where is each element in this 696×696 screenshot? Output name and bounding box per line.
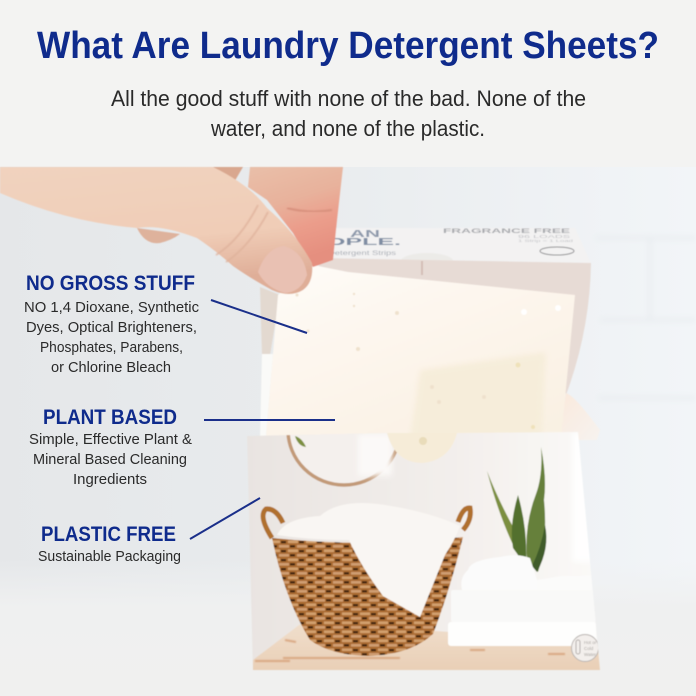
callout: plant based	[29, 406, 192, 488]
box lid, printed outer side	[320, 228, 591, 269]
printed: wooden table	[253, 622, 600, 670]
printed: hot or cold water badge: Water	[584, 652, 596, 657]
pointer line: plant based	[204, 419, 335, 421]
callout: no gross stuff: Dyes, Optical Brighteners,	[26, 319, 197, 336]
soft second sheet showing through	[410, 352, 546, 440]
right side flap	[558, 393, 600, 440]
printed: window light	[578, 440, 579, 441]
printed: folded towel stack	[448, 554, 572, 646]
subtitle	[111, 86, 586, 141]
subtitle: All the good stuff with none of the bad. None of the	[111, 86, 586, 111]
hand: thumb	[0, 167, 312, 294]
printed: basket handles	[263, 508, 470, 538]
hand: thumb curl shadow	[137, 228, 180, 243]
printed: hot or cold water badge: Cold	[584, 646, 594, 651]
subtitle: water, and none of the plastic.	[210, 116, 485, 141]
printed: snake plant	[487, 447, 546, 572]
printed: hot or cold water badge	[572, 634, 598, 662]
pointer line: plastic free	[190, 498, 260, 539]
lid fold crease	[421, 261, 423, 275]
callout: no gross stuff: NO GROSS STUFF	[26, 272, 195, 295]
box lid, inner side	[318, 258, 591, 395]
callout: plant based: Mineral Based Cleaning	[33, 451, 187, 468]
index knuckle crease	[287, 208, 332, 212]
printed: round mirror	[286, 434, 398, 488]
box front face with printed photo	[248, 432, 600, 670]
printed: wicker basket	[271, 536, 464, 656]
box lid, printed outer side: Detergent Strips	[328, 251, 396, 257]
back finger	[213, 167, 243, 184]
box lid, printed outer side: AN	[350, 229, 380, 240]
printed: towel in basket	[277, 503, 460, 617]
thumbnail	[258, 246, 307, 293]
callout: no gross stuff: NO 1,4 Dioxane, Synthetic	[24, 299, 199, 316]
callout: plant based: Ingredients	[73, 471, 147, 488]
box lid, printed outer side: OPLE.	[326, 237, 402, 248]
box lid, printed outer side: FRAGRANCE FREE	[443, 229, 570, 235]
photo: detergent sheet box and hand	[0, 167, 602, 670]
title: What Are Laundry Detergent Sheets?	[37, 25, 659, 67]
printed: hot or cold water badge: Hot or	[584, 640, 597, 645]
pointer line: no gross stuff	[211, 300, 307, 333]
sheet notch tint	[385, 433, 460, 464]
hand: index finger	[248, 167, 343, 267]
header band	[0, 0, 696, 167]
box lid, printed outer side: 1 Strip = 1 Load	[518, 238, 573, 243]
callout: plastic free: Sustainable Packaging	[38, 548, 181, 565]
callout: plastic free	[38, 523, 181, 565]
left inner flap	[260, 287, 280, 355]
callout: plant based: Simple, Effective Plant &	[29, 431, 192, 448]
photo background	[0, 167, 402, 586]
white inner box wall	[260, 354, 273, 436]
thumb knuckle creases	[216, 205, 268, 262]
detergent sheet	[266, 265, 575, 464]
callout: plastic free: PLASTIC FREE	[41, 523, 176, 546]
callout: no gross stuff: or Chlorine Bleach	[51, 359, 171, 376]
callout: no gross stuff	[24, 272, 199, 376]
callout: plant based: PLANT BASED	[43, 406, 177, 429]
callout: no gross stuff: Phosphates, Parabens,	[40, 339, 183, 356]
sheet bubbles	[296, 293, 561, 445]
box lid, printed outer side: 96 LOADS	[518, 234, 570, 239]
